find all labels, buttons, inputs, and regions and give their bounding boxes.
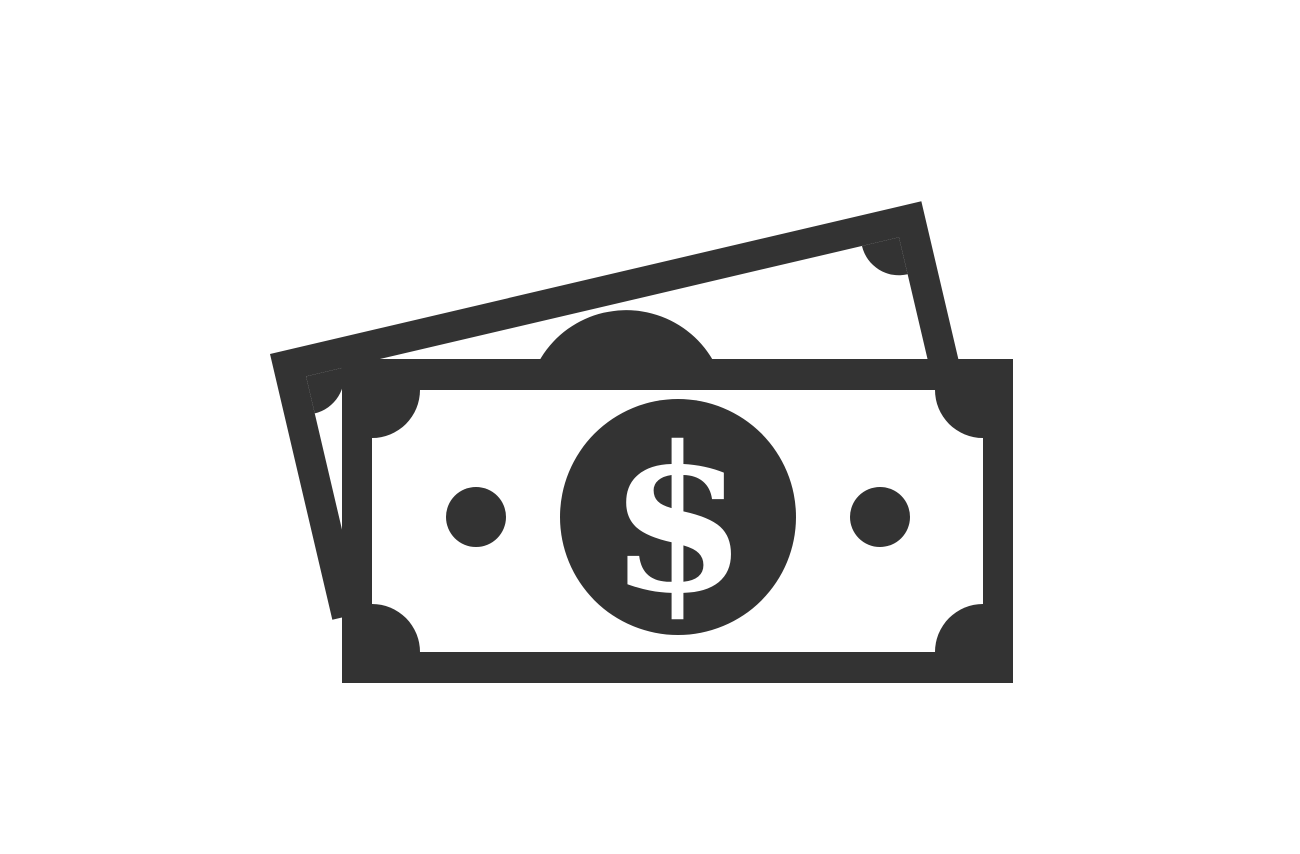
illustration: money bills icon	[270, 201, 1013, 683]
icon: left dot	[446, 487, 506, 547]
dollar sign: $	[608, 403, 748, 638]
icon: back bill	[270, 201, 958, 620]
icon: right dot	[850, 487, 910, 547]
icon: front bill	[342, 359, 1013, 683]
icon: center circle	[560, 399, 796, 635]
